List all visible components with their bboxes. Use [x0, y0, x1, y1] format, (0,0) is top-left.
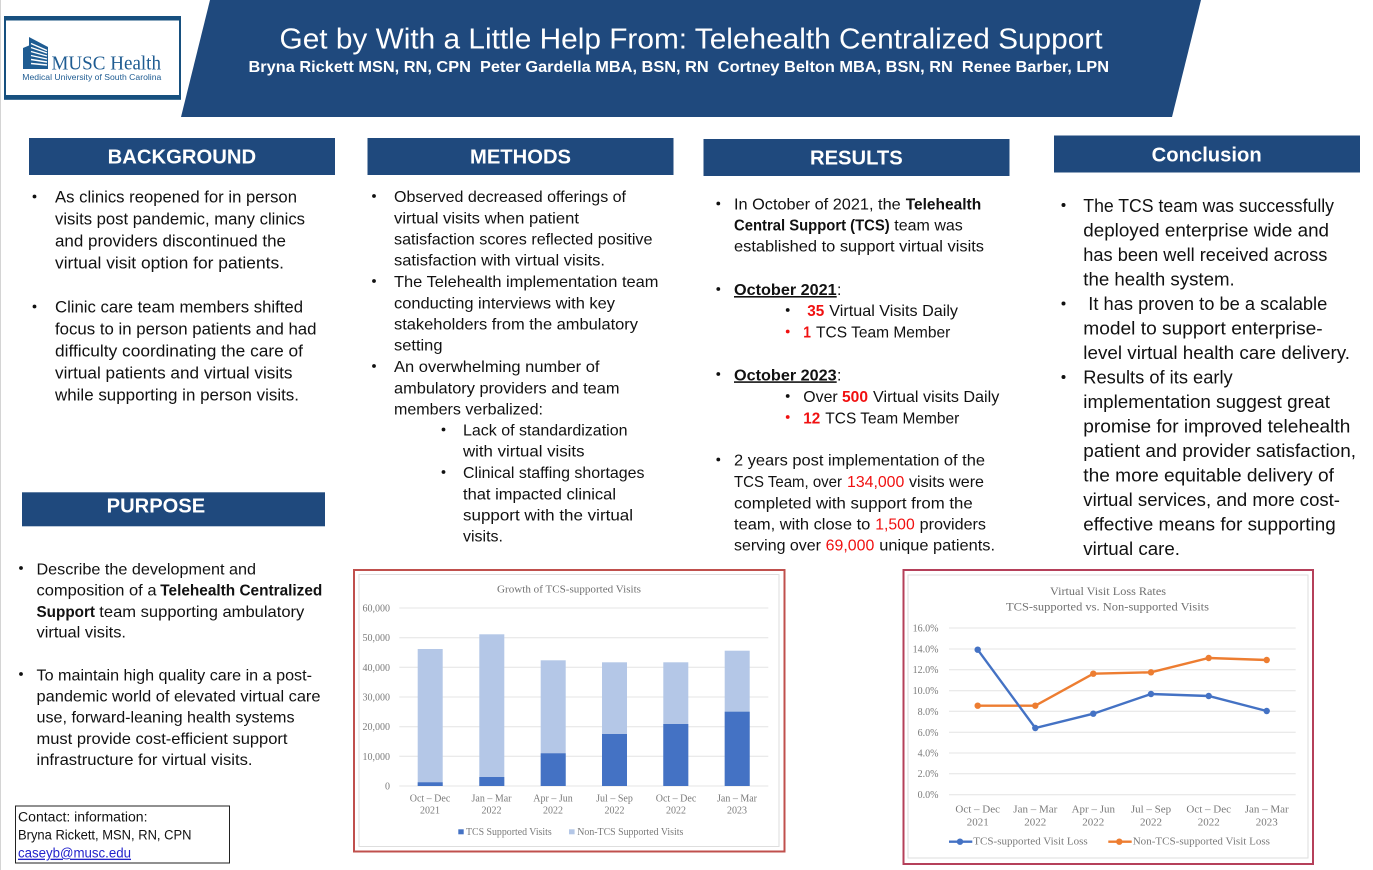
bar chart: growth of TCS-supported visits [354, 570, 784, 852]
y axis labels: 40,000 [362, 663, 390, 674]
heading: methods [368, 138, 674, 175]
text block: two-year outcomes: team, with close to [734, 516, 871, 533]
text block: conclusion bullets: It has proven to be a scalable [1088, 294, 1327, 314]
x axis labels: Oct – Dec [955, 803, 1000, 815]
x axis labels: Jan – Mar [472, 794, 512, 805]
x axis labels: Apr – Jun [1072, 803, 1115, 815]
text block: methods bullets: virtual visits when patient [394, 210, 580, 227]
text block: conclusion bullets: virtual services, and more cost- [1083, 490, 1340, 510]
heading: conclusion [1054, 136, 1360, 172]
text block: two-year outcomes: completed with support from the [734, 495, 973, 512]
panel: purpose [19, 492, 325, 769]
x axis labels: 2022 [543, 806, 563, 816]
text block: conclusion bullets: the health system. [1083, 270, 1235, 290]
series: non-TCS-supported visit loss [974, 655, 1270, 709]
text block: methods bullets: An overwhelming number of [394, 359, 600, 376]
text block: two-year outcomes [716, 453, 995, 555]
y axis labels: 2.0% [918, 769, 938, 780]
text block: conclusion bullets: Results of its early [1083, 368, 1234, 388]
text block: purpose bullets: Describe the development and [36, 561, 256, 578]
text block: October 2023 stats: October 2023 [734, 367, 837, 384]
heading: background [29, 138, 335, 175]
text block: methods bullets: support with the virtual [463, 508, 633, 525]
chart title: Virtual Visit Loss Rates [1050, 584, 1166, 598]
x axis labels: Oct – Dec [410, 794, 451, 805]
x axis labels: Jul – Sep [596, 794, 633, 805]
text block: October 2021 stats: : [837, 282, 841, 299]
panel: results [704, 139, 1010, 555]
heading: results: RESULTS [810, 147, 903, 169]
text block: October 2023 stats: : [837, 367, 841, 384]
text block: October 2023 stats: TCS Team Member [825, 410, 959, 427]
text block: conclusion bullets: effective means for supporting [1083, 515, 1336, 535]
text block: October 2023 stats: 12 [803, 410, 821, 427]
text block: October 2023 stats [716, 367, 999, 427]
text block: conclusion bullets: level virtual health care delivery. [1083, 343, 1350, 363]
text block: two-year outcomes: 1,500 [875, 516, 915, 533]
text block: conclusion bullets [1062, 196, 1356, 559]
logo: MUSC Health: MUSC Health [52, 52, 161, 74]
text block: background bullets: and providers discontinued the [55, 233, 286, 251]
y axis labels [913, 624, 938, 801]
x axis labels: Jul – Sep [1131, 803, 1172, 815]
chart title: TCS-supported vs. Non-supported Visits [1006, 600, 1209, 614]
text block: methods bullets: satisfaction scores reflected positive [394, 231, 653, 248]
text block: October 2021 stats: 1 [803, 324, 811, 341]
text block: methods bullets: conducting interviews with key [394, 295, 615, 312]
text block: conclusion bullets: deployed enterprise wide and [1083, 221, 1329, 241]
stacked bars [418, 634, 750, 786]
y axis labels: 6.0% [918, 728, 938, 739]
text block: background bullets: while supporting in person visits. [54, 387, 299, 405]
x axis labels: 2022 [666, 806, 686, 816]
y axis labels: 10,000 [362, 752, 390, 763]
y axis labels: 8.0% [918, 707, 938, 718]
text block: conclusion bullets: virtual care. [1083, 539, 1180, 559]
logo: MUSC Health [4, 16, 181, 100]
text block: purpose bullets: To maintain high quality care in a post- [36, 668, 312, 685]
y axis labels: 50,000 [362, 633, 390, 644]
text block: October 2021 stats: October 2021 [734, 282, 837, 299]
text block: purpose bullets: use, forward-leaning health systems [36, 710, 295, 727]
text block: conclusion bullets: implementation suggest great [1083, 392, 1330, 412]
text block: October 2021 stats: Virtual Visits Daily [829, 303, 958, 320]
x axis labels: Oct – Dec [656, 794, 697, 805]
text block: two-year outcomes: 69,000 [826, 538, 875, 555]
text block: two-year outcomes: providers [920, 516, 986, 533]
text block: purpose bullets: infrastructure for virtual visits. [36, 752, 252, 769]
x axis labels: Apr – Jun [533, 794, 573, 805]
text block: October 2021 stats [716, 282, 958, 341]
text block: purpose bullets: team supporting ambulatory [99, 604, 304, 621]
text block: background bullets: difficulty coordinating the care of [55, 343, 304, 361]
text block: methods bullets: Observed decreased offerings of [394, 189, 627, 206]
x axis labels: 2022 [482, 806, 502, 816]
text block: October 2023 stats: Virtual visits Daily [873, 389, 999, 406]
text block: methods bullets: ambulatory providers and team [394, 380, 620, 397]
text block: results summary [716, 196, 984, 256]
text block: methods bullets: with virtual visits [462, 444, 585, 461]
contact box [16, 806, 230, 863]
panel: background [29, 138, 335, 405]
x axis labels: 2023 [1256, 817, 1278, 829]
x axis labels: 2023 [727, 806, 747, 816]
x axis labels: 2022 [1024, 817, 1046, 829]
text block: two-year outcomes: serving over [734, 538, 821, 555]
text block: two-year outcomes: 134,000 [847, 474, 905, 491]
text block: conclusion bullets: the more equitable delivery of [1083, 466, 1335, 486]
x axis labels: Jan – Mar [717, 794, 758, 805]
x axis labels: Oct – Dec [1186, 803, 1231, 815]
text block: purpose bullets: virtual visits. [36, 625, 126, 642]
text block: methods bullets: stakeholders from the ambulatory [394, 316, 638, 333]
text block: methods bullets: Clinical staffing shortages [463, 465, 645, 482]
panel: methods [368, 138, 674, 546]
line chart: virtual visit loss rates [904, 570, 1313, 864]
text block: results summary: Telehealth [906, 196, 981, 213]
x axis labels: 2022 [604, 806, 624, 816]
y axis labels: 0.0% [918, 790, 938, 801]
text block: background bullets: Clinic care team members shifted [55, 299, 303, 317]
text block: results summary: Central Support (TCS) [734, 217, 890, 234]
chart title: Growth of TCS-supported Visits [497, 584, 641, 596]
text block: methods bullets: Lack of standardization [463, 423, 628, 440]
text block: purpose bullets: Support [36, 604, 96, 621]
x axis labels: Jan – Mar [1245, 803, 1289, 815]
y axis labels: 16.0% [913, 624, 938, 634]
text block: methods bullets [372, 189, 658, 546]
title: Get by With a Little Help From: Telehealth Centralized Support [280, 24, 1102, 56]
text block: methods bullets: The Telehealth implementation team [394, 274, 658, 291]
chart legend [949, 836, 1270, 848]
text block: purpose bullets: Telehealth Centralized [160, 582, 322, 600]
text block: methods bullets: setting [394, 338, 442, 355]
authors: Bryna Rickett MSN, RN, CPN Peter Gardella MBA, BSN, RN Cortney Belton MBA, BSN, RN Renee Barber, LPN [248, 59, 1109, 76]
y axis labels: 60,000 [362, 604, 390, 614]
heading: methods: METHODS [470, 146, 571, 168]
chart legend [458, 827, 683, 838]
x axis labels: 2021 [420, 806, 440, 816]
text block: October 2021 stats: TCS Team Member [816, 324, 950, 341]
chart legend: TCS-supported Visit Loss [973, 836, 1088, 848]
x axis labels: 2022 [1082, 817, 1104, 829]
heading: purpose: PURPOSE [107, 496, 205, 518]
y axis labels [362, 604, 390, 792]
text block: conclusion bullets: patient and provider satisfaction, [1083, 441, 1356, 461]
text block: October 2023 stats: 500 [842, 389, 868, 406]
x axis labels: 2021 [967, 817, 989, 829]
text block: two-year outcomes: TCS Team, over [734, 474, 842, 491]
text block: purpose bullets: composition of a [36, 582, 157, 600]
x axis labels: 2022 [1198, 817, 1220, 829]
text block: background bullets: As clinics reopened for in person [55, 189, 297, 207]
text block: methods bullets: visits. [463, 529, 503, 546]
text block: results summary: established to support virtual visits [734, 239, 984, 256]
x axis labels [410, 794, 758, 816]
x axis labels: 2022 [1140, 817, 1162, 829]
text block: October 2021 stats: 35 [807, 303, 825, 320]
y axis labels: 4.0% [918, 748, 938, 760]
x axis labels: Jan – Mar [1013, 803, 1058, 815]
text block: conclusion bullets: The TCS team was successfully [1083, 196, 1335, 216]
text block: results summary: In October of 2021, the [734, 196, 901, 213]
heading: background: BACKGROUND [108, 146, 256, 168]
y axis labels: 20,000 [362, 722, 390, 733]
title banner [181, 0, 1201, 117]
y axis labels: 14.0% [913, 644, 938, 656]
text block: purpose bullets: pandemic world of elevated virtual care [36, 689, 321, 706]
series: TCS-supported visit loss [974, 646, 1270, 731]
chart legend: Non-TCS Supported Visits [577, 827, 683, 838]
contact box: Contact: information: [18, 810, 148, 825]
text block: methods bullets: that impacted clinical [463, 486, 616, 503]
text block: two-year outcomes: visits were [909, 474, 984, 491]
y axis labels: 0 [385, 782, 390, 792]
y axis labels: 30,000 [362, 692, 390, 704]
text block: methods bullets: members verbalized: [394, 401, 543, 418]
text block: background bullets [33, 189, 316, 405]
heading: results [704, 139, 1010, 176]
panel: conclusion [1054, 136, 1360, 559]
heading: purpose [22, 492, 325, 526]
x axis labels [955, 803, 1289, 829]
text block: conclusion bullets: has been well received across [1083, 245, 1327, 265]
chart title [1006, 584, 1209, 614]
y axis labels: 12.0% [913, 665, 938, 676]
chart legend: TCS Supported Visits [466, 827, 552, 838]
contact box: Bryna Rickett, MSN, RN, CPN [18, 828, 192, 842]
text block: methods bullets: satisfaction with virtual visits. [394, 253, 605, 270]
text block: results summary: team was [894, 217, 963, 234]
text block: background bullets: visits post pandemic, many clinics [55, 211, 305, 229]
text block: purpose bullets: must provide cost-efficient support [36, 731, 288, 748]
contact box: caseyb@musc.edu [18, 846, 131, 861]
text block: conclusion bullets: model to support enterprise- [1083, 319, 1323, 339]
text block: purpose bullets [19, 561, 322, 769]
heading: conclusion: Conclusion [1152, 145, 1262, 167]
text block: background bullets: virtual patients and virtual visits [55, 365, 292, 383]
chart legend: Non-TCS-supported Visit Loss [1133, 836, 1270, 848]
text block: background bullets: focus to in person patients and had [55, 321, 316, 339]
text block: two-year outcomes: 2 years post implementation of the [734, 453, 985, 470]
text block: two-year outcomes: unique patients. [879, 538, 995, 555]
text block: October 2023 stats: Over [803, 389, 838, 406]
text block: background bullets: virtual visit option for patients. [55, 255, 284, 273]
text block: conclusion bullets: promise for improved telehealth [1083, 417, 1350, 437]
logo: MUSC Health: Medical University of South Carolina [22, 72, 162, 82]
y axis labels: 10.0% [913, 686, 938, 697]
